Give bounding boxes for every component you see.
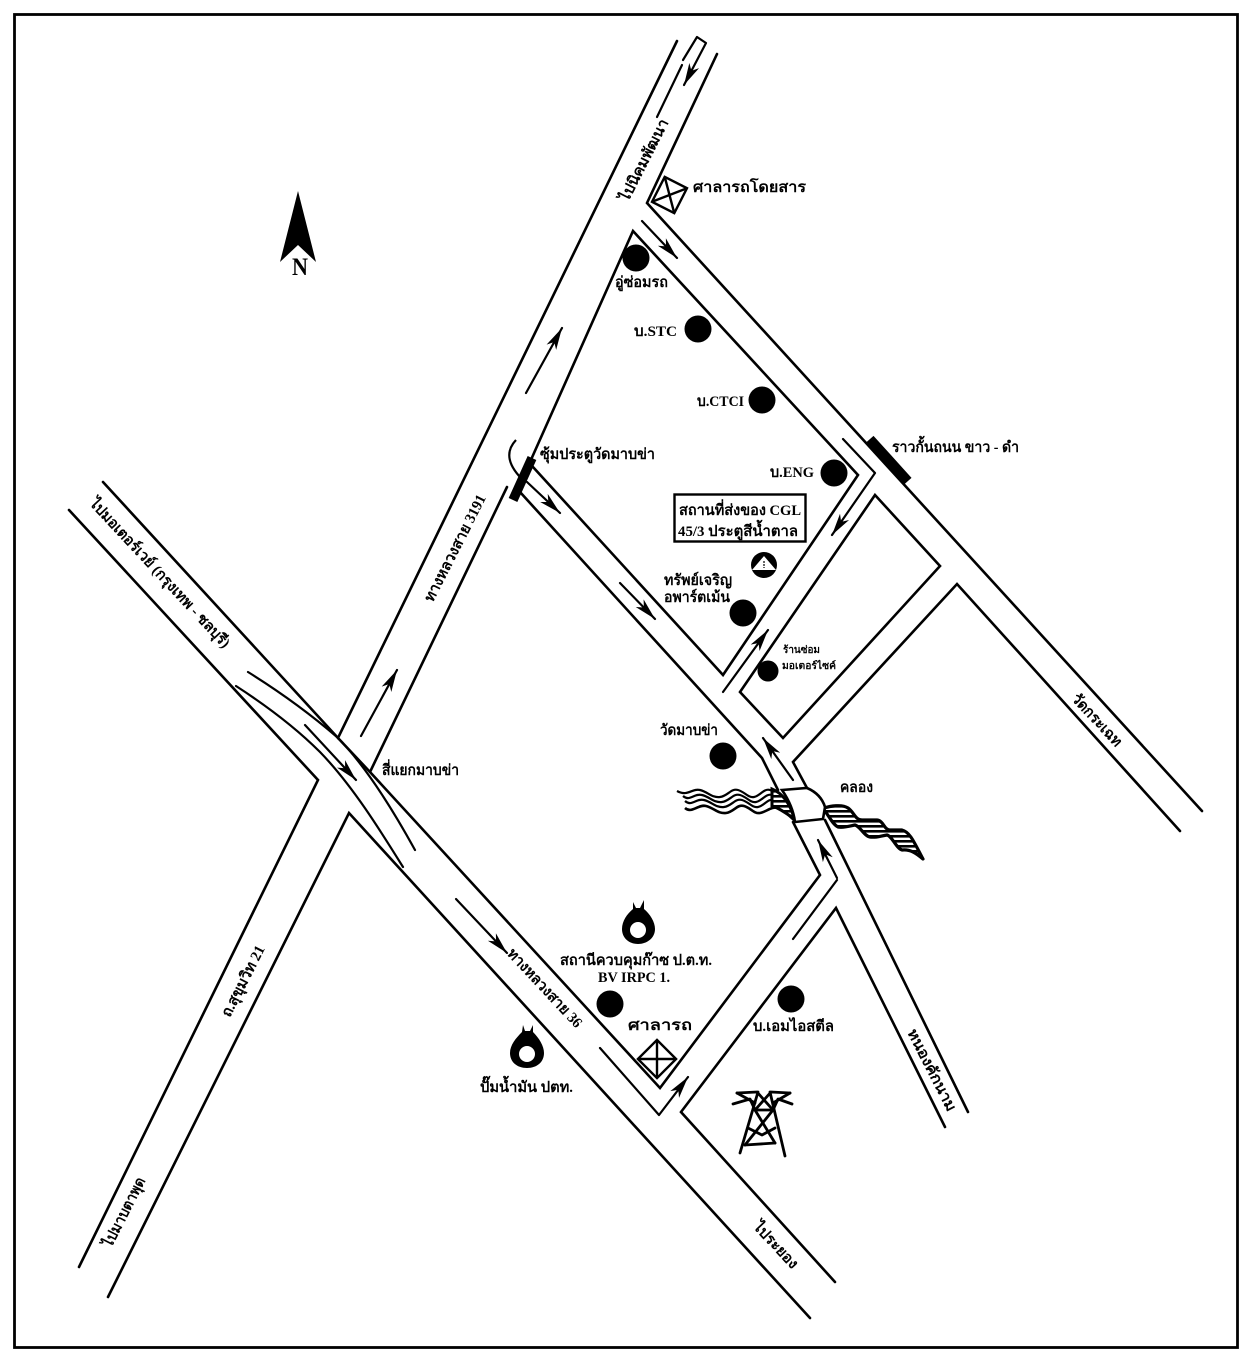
road: junction arrow <box>305 725 356 780</box>
icon: north arrow: N <box>292 254 308 281</box>
callout: delivery location <box>674 494 806 542</box>
icon: canal east <box>824 806 923 859</box>
road: median arrow at triangle top <box>642 221 677 258</box>
road: flyover curve lower <box>236 686 403 867</box>
road: north median <box>657 65 682 117</box>
icon: transmission tower <box>733 1092 792 1156</box>
road: highway 36 arrow <box>456 899 507 953</box>
road: median at east corner with arrow <box>832 439 875 535</box>
road: highway 36 east upper edge <box>370 487 820 1088</box>
dot: ENG <box>820 460 848 486</box>
callout: delivery location: 45/3 ประตูสีน้ำตาล <box>678 519 798 541</box>
icon: bus stop shelter <box>638 1040 676 1078</box>
label: bus stop: ศาลารถ <box>628 1018 692 1034</box>
label: to Rayong: ไประยอง <box>748 1216 803 1272</box>
label: CTCI: บ.CTCI <box>697 394 744 410</box>
road: median arrow north of junction <box>361 670 397 736</box>
dot: apartment <box>730 600 756 626</box>
label: ENG: บ.ENG <box>770 465 814 481</box>
label: gas control station: สถานีควบคุมก๊าซ ป.ต.ท. <box>560 951 712 970</box>
label: canal: คลอง <box>840 780 873 796</box>
dot: CTCI <box>748 386 776 414</box>
road: Nong Kham road east edge <box>825 820 968 1112</box>
label: highway 3191: ทางหลวงสาย 3191 <box>422 492 490 605</box>
road: highway 36 west upper edge and highway 3191 west edge <box>103 41 677 738</box>
callout: delivery location: สถานที่ส่งของ CGL <box>679 499 801 519</box>
label: apartment: อพาร์ตเม้น <box>664 588 731 606</box>
road: city block east <box>740 495 940 738</box>
label: apartment: ทรัพย์เจริญ <box>664 571 732 589</box>
road: median arrow below gate <box>527 482 560 513</box>
label: gas control station: BV IRPC 1. <box>598 970 670 986</box>
road: highway 36 through junction <box>338 738 370 772</box>
icon: canal west <box>677 789 794 820</box>
road: flyover curve upper <box>248 672 415 850</box>
icon: black and white barrier <box>870 439 908 481</box>
dot: STC <box>684 316 712 342</box>
road: upper north median loop <box>683 37 706 85</box>
label: to motorway: ไปมอเตอร์เวย์ (กรุงเทพ - ชลบุรี) <box>84 492 235 652</box>
label: Wat Maab Kha gate: ซุ้มประตูวัดมาบข่า <box>540 446 655 464</box>
label: motorcycle repair: ร้านซ่อม <box>783 644 820 656</box>
icon: PTT flame <box>510 1025 544 1068</box>
label: Wat Kradot: วัดกระเฉท <box>1068 690 1125 750</box>
label: highway 36: ทางหลวงสาย 36 <box>504 946 585 1032</box>
icon: bridge <box>782 788 825 822</box>
road: Sukhumvit 21 east edge and highway 36 lower edge <box>108 813 810 1318</box>
road: Wat Kradot road lower edge <box>793 584 1180 831</box>
road: highway 36 west lower edge and Sukhumvit 21 west edge <box>69 510 318 1267</box>
dot: gas station <box>596 990 624 1018</box>
label: Sukhumvit 21: ถ.สุขุมวิท 21 <box>217 942 270 1020</box>
dot: Wat Maab Kha <box>710 742 736 770</box>
label: Nong Kham: หนองคักนาม <box>904 1026 960 1114</box>
icon: gas control flame <box>622 900 655 944</box>
label: to Phatthana industrial estate: ไปนิคมพัฒนา <box>614 115 672 206</box>
label: to Map Ta Phut: ไปมาบตาพุด <box>97 1174 150 1252</box>
label: garage: อู่ซ่อมรถ <box>615 274 668 292</box>
road: median arrow south of bridge <box>818 840 837 878</box>
label: Wat Maab Kha: วัดมาบข่า <box>660 722 718 739</box>
road: south median <box>793 880 837 939</box>
icon: north arrow <box>280 191 316 281</box>
label: bus shelter: ศาลารถโดยสาร <box>693 177 807 196</box>
icon: Wat Maab Kha gate <box>509 440 532 500</box>
road: northeast outer edge <box>647 54 1202 811</box>
label: apartment <box>664 571 732 606</box>
road: south plot <box>681 908 945 1282</box>
road: median arrow toward parcel <box>723 630 768 692</box>
dot: garage <box>622 244 650 272</box>
label: motorcycle repair <box>782 644 836 672</box>
dot: M Steel <box>778 986 804 1012</box>
label: gas control station <box>560 951 712 986</box>
label: STC: บ.STC <box>634 324 677 340</box>
label: M Steel: บ.เอมไอสตีล <box>753 1016 834 1035</box>
icon: warning triangle <box>751 552 777 578</box>
icon: bus shelter north <box>652 177 687 213</box>
label: PTT station: ปั๊มน้ำมัน ปตท. <box>480 1075 573 1096</box>
label: barrier: ราวกั้นถนน ขาว - ดำ <box>892 435 1019 456</box>
road: median arrow soi <box>620 583 655 619</box>
road: parcel triangle block <box>530 231 858 675</box>
label: Maab Kha intersection: สี่แยกมาบข่า <box>382 759 459 779</box>
road: U-turn median with arrow <box>600 1048 688 1115</box>
road: median arrow near market <box>526 328 562 393</box>
road: soi Wat Maab Kha west edge <box>520 492 778 790</box>
label: motorcycle repair: มอเตอร์ไซค์ <box>782 659 836 672</box>
road: median arrow north of bridge <box>763 738 793 780</box>
dot: motorcycle repair <box>758 660 778 682</box>
